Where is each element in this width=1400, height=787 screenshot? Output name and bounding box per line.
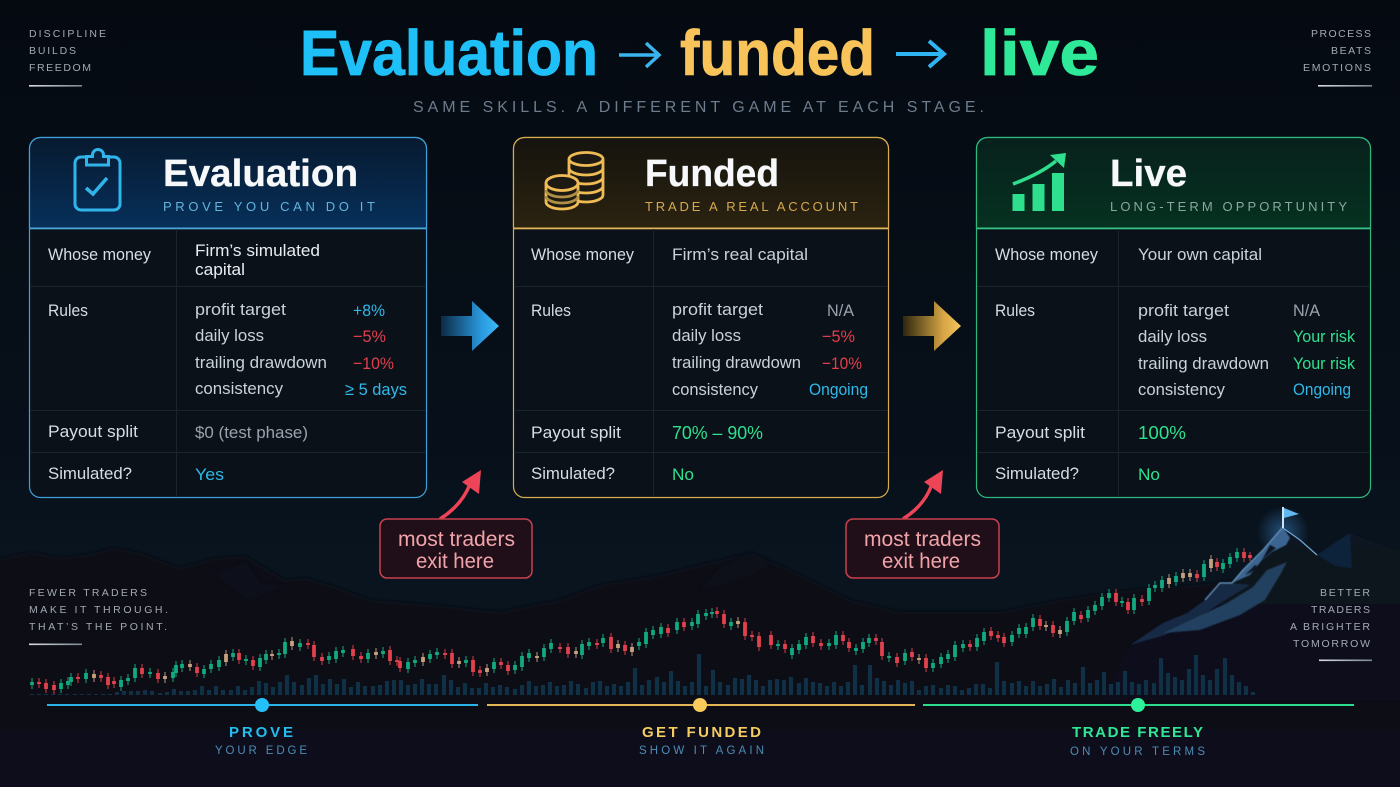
- row: rules: daily loss: [672, 326, 741, 345]
- background: mountains: [0, 548, 1400, 787]
- row: rules: −10%: [822, 354, 862, 373]
- row: rules: [531, 300, 868, 399]
- note: discipline builds freedom: BUILDS: [29, 45, 76, 57]
- icon: clipboard: [75, 150, 120, 210]
- title: live: [980, 17, 1099, 89]
- row: payout split: [531, 423, 763, 443]
- row: rules: trailing drawdown: [672, 353, 801, 372]
- row: whose money: [995, 245, 1262, 264]
- timeline: trade freely: ON YOUR TERMS: [1070, 746, 1205, 758]
- chart: candlesticks: [32, 548, 1250, 694]
- note: discipline builds freedom: DISCIPLINE: [29, 28, 106, 40]
- heading: evaluation: [163, 153, 375, 214]
- title: Evaluation: [300, 17, 598, 89]
- subtitle: SAME SKILLS. A DIFFERENT GAME AT EACH STAGE.: [413, 99, 984, 116]
- title: funded: [680, 17, 875, 89]
- row: rules: ≥ 5 days: [345, 380, 407, 399]
- row: payout split: Payout split: [995, 423, 1085, 442]
- row: rules: [995, 301, 1355, 399]
- note: fewer traders: THAT’S THE POINT.: [29, 621, 167, 633]
- callout: most traders exit here (second): [846, 470, 999, 578]
- row: rules: trailing drawdown: [1138, 354, 1269, 373]
- row: whose money: Firm’s real capital: [672, 245, 808, 264]
- note: better traders: [1290, 587, 1372, 661]
- row: simulated: [48, 464, 224, 484]
- timeline: get funded: SHOW IT AGAIN: [639, 745, 764, 757]
- timeline: get funded: GET FUNDED: [642, 724, 761, 741]
- row: payout split: [48, 422, 308, 442]
- heading: evaluation: PROVE YOU CAN DO IT: [163, 199, 375, 214]
- note: fewer traders: MAKE IT THROUGH.: [29, 604, 168, 616]
- chart: volume bars: [32, 654, 1253, 695]
- mountain peak with flag: [1100, 506, 1400, 700]
- row: rules: consistency: [672, 380, 758, 399]
- row: rules: Ongoing: [809, 380, 868, 399]
- row: payout split: 100%: [1138, 423, 1186, 443]
- timeline: trade freely: TRADE FREELY: [1072, 724, 1203, 741]
- note: better traders: BETTER: [1320, 587, 1370, 599]
- panel: funded: [514, 138, 888, 498]
- heading: live: [1110, 153, 1347, 214]
- note: better traders: A BRIGHTER: [1290, 621, 1370, 633]
- timeline: trade freely: [923, 698, 1354, 758]
- callout: most traders exit here (second): exit here: [882, 550, 960, 573]
- note: discipline builds freedom: [29, 28, 106, 87]
- row: rules: Rules: [531, 301, 571, 320]
- note: fewer traders: FEWER TRADERS: [29, 587, 147, 599]
- row: payout split: [995, 423, 1186, 443]
- heading: live: Live: [1110, 153, 1187, 195]
- icon: coins: [546, 152, 603, 209]
- note: discipline builds freedom: FREEDOM: [29, 62, 91, 74]
- row: simulated: No: [1138, 465, 1160, 484]
- row: rules: N/A: [1293, 301, 1321, 320]
- heading: live: LONG-TERM OPPORTUNITY: [1110, 199, 1347, 214]
- arrow: evaluation to funded: [441, 301, 499, 351]
- row: rules: +8%: [353, 301, 385, 320]
- row: whose money: Your own capital: [1138, 245, 1262, 264]
- note: better traders: TOMORROW: [1293, 638, 1370, 650]
- row: rules: trailing drawdown: [195, 353, 327, 372]
- timeline: prove: PROVE: [229, 724, 293, 741]
- callout: most traders exit here (first): exit here: [416, 550, 494, 573]
- panel: live: [976, 138, 1370, 498]
- row: rules: −5%: [353, 327, 386, 346]
- heading: funded: Funded: [645, 153, 779, 195]
- row: rules: profit target: [1138, 301, 1229, 320]
- timeline: prove: [47, 698, 478, 757]
- row: rules: daily loss: [195, 326, 264, 345]
- icon: rising bars: [1012, 153, 1066, 211]
- row: payout split: 70% – 90%: [672, 423, 763, 443]
- callout: most traders exit here (first): most traders: [398, 528, 515, 551]
- row: whose money: Whose money: [48, 245, 151, 264]
- arrow: funded to live: [903, 301, 961, 351]
- note: better traders: TRADERS: [1311, 604, 1370, 616]
- note: process beats emotions: [1303, 28, 1372, 87]
- row: rules: Rules: [48, 301, 88, 320]
- row: whose money: [531, 245, 808, 264]
- heading: funded: [645, 153, 858, 214]
- row: payout split: Payout split: [48, 422, 138, 441]
- row: simulated: Simulated?: [995, 464, 1079, 483]
- row: rules: profit target: [195, 300, 286, 319]
- row: rules: consistency: [1138, 380, 1225, 399]
- row: rules: −10%: [353, 354, 394, 373]
- note: fewer traders: [29, 587, 168, 645]
- row: rules: Your risk: [1293, 327, 1355, 346]
- row: simulated: [995, 464, 1160, 484]
- row: rules: N/A: [827, 301, 855, 320]
- row: payout split: $0 (test phase): [195, 423, 308, 442]
- row: rules: [48, 300, 407, 399]
- row: rules: daily loss: [1138, 327, 1207, 346]
- row: rules: Ongoing: [1293, 380, 1351, 399]
- row: whose money: capital: [195, 260, 245, 279]
- row: payout split: Payout split: [531, 423, 621, 442]
- row: rules: Rules: [995, 301, 1035, 320]
- row: simulated: Simulated?: [531, 464, 615, 483]
- note: process beats emotions: PROCESS: [1311, 28, 1371, 40]
- row: rules: consistency: [195, 379, 283, 398]
- row: whose money: Whose money: [995, 245, 1098, 264]
- title: [300, 17, 1099, 89]
- row: whose money: [48, 241, 320, 279]
- row: rules: −5%: [822, 327, 855, 346]
- row: simulated: Simulated?: [48, 464, 132, 483]
- row: simulated: [531, 464, 694, 484]
- callout: most traders exit here (first): [380, 470, 532, 578]
- row: simulated: No: [672, 465, 694, 484]
- heading: funded: TRADE A REAL ACCOUNT: [645, 199, 858, 214]
- row: rules: Your risk: [1293, 354, 1355, 373]
- row: whose money: Firm’s simulated: [195, 241, 320, 260]
- row: whose money: Whose money: [531, 245, 634, 264]
- timeline: get funded: [487, 698, 915, 757]
- row: rules: profit target: [672, 300, 763, 319]
- note: process beats emotions: EMOTIONS: [1303, 62, 1371, 74]
- row: simulated: Yes: [195, 465, 224, 484]
- heading: evaluation: Evaluation: [163, 153, 358, 195]
- callout: most traders exit here (second): most traders: [864, 528, 981, 551]
- timeline: prove: YOUR EDGE: [215, 745, 307, 757]
- panel: evaluation: [30, 138, 426, 498]
- note: process beats emotions: BEATS: [1331, 45, 1371, 57]
